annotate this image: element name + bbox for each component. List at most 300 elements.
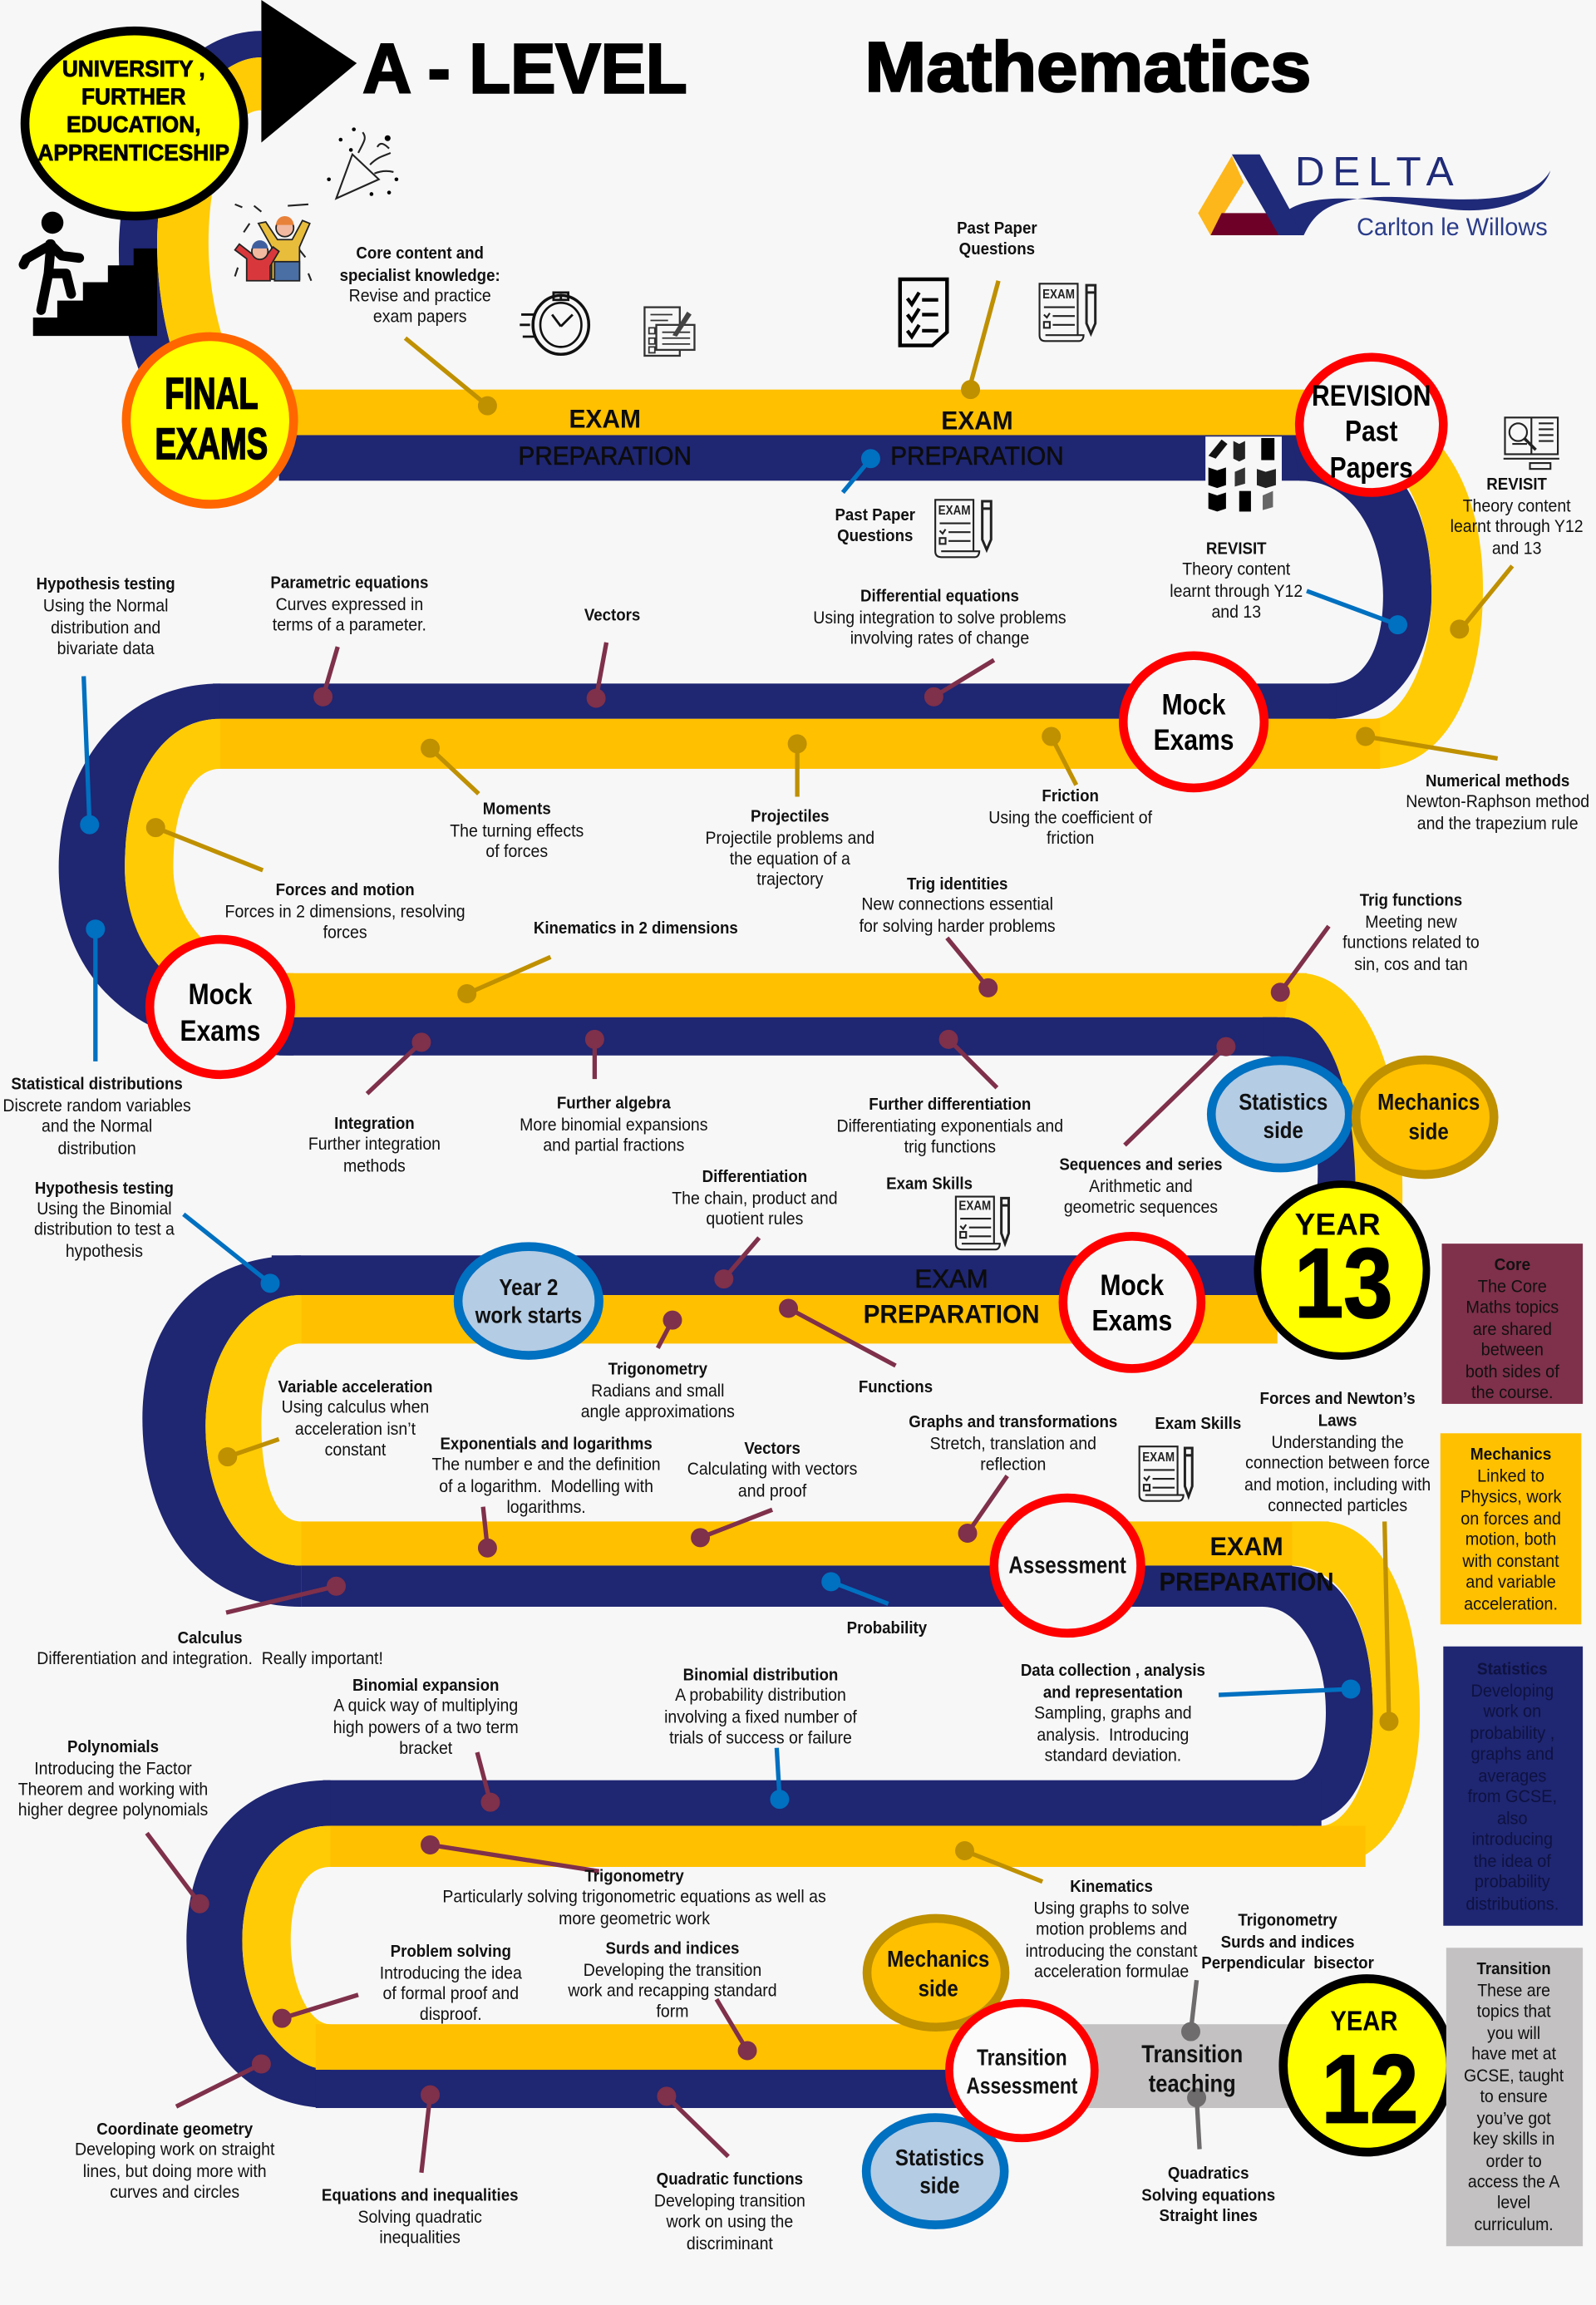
topic: Quadratics, solving equations, straight lines: Quadratics bbox=[1168, 2164, 1249, 2183]
topic: Differentiation: quotient rules bbox=[706, 1209, 803, 1229]
topic: Trig identities: for solving harder problems bbox=[860, 918, 1056, 936]
logo: Delta Carlton le Willows: DELTA bbox=[1295, 149, 1454, 195]
topic: Revisit (left): learnt through Y12 bbox=[1170, 582, 1303, 601]
topic: Exponentials and logarithms: The number e and the definition bbox=[432, 1455, 661, 1475]
exam preparation label 1 bbox=[519, 404, 692, 470]
node: University, further education, apprenticeship: UNIVERSITY , bbox=[62, 56, 205, 81]
topic: Further algebra: Further algebra bbox=[557, 1094, 671, 1113]
topic: Differentiation: The chain, product and bbox=[672, 1189, 838, 1209]
topic: Differential equations: involving rates of change bbox=[850, 629, 1029, 648]
topic: Forces and motion bbox=[147, 819, 466, 943]
topic: Forces and Newton's Laws: Laws bbox=[1318, 1411, 1357, 1431]
topic: Forces and Newton's Laws: connection between force bbox=[1245, 1454, 1430, 1473]
topic: Binomial distribution bbox=[664, 1666, 857, 1808]
topic: Hypothesis testing (Normal): bivariate data bbox=[57, 639, 155, 658]
topic: Vectors (year 12) bbox=[687, 1439, 857, 1546]
topic: Hypothesis testing (Normal): Hypothesis testing bbox=[37, 574, 175, 593]
topic: Trigonometry (year 12): Radians and small bbox=[591, 1382, 724, 1401]
node: Statistics side (year 12): Statistics bbox=[895, 2146, 984, 2170]
panel: Transition: These are bbox=[1477, 1982, 1550, 2001]
topic: Functions: Functions bbox=[859, 1377, 933, 1396]
topic: Trigonometry, surds and indices, perpendicular bisector: Trigonometry bbox=[1238, 1911, 1337, 1930]
node: Mock Exams (year 13 end) bbox=[1123, 656, 1264, 788]
topic: Statistical distributions: and the Normal bbox=[42, 1117, 152, 1136]
panel: Mechanics bbox=[1441, 1433, 1581, 1624]
topic: Trigonometry, surds and indices, perpendicular bisector: Surds and indices bbox=[1221, 1933, 1355, 1952]
node: Mock Exams (year 13 start): Exams bbox=[180, 1014, 260, 1047]
topic: Sequences and series bbox=[1059, 1038, 1234, 1217]
topic: Trig identities: Trig identities bbox=[907, 874, 1007, 894]
topic: Forces and Newton's Laws: Forces and Newton’s bbox=[1260, 1389, 1416, 1408]
topic: Kinematics: introducing the constant bbox=[1026, 1942, 1198, 1961]
icon: exam paper assessment bbox=[1140, 1446, 1192, 1501]
logo: Delta Carlton le Willows: Carlton le Willows bbox=[1357, 214, 1548, 241]
topic: Polynomials bbox=[18, 1737, 209, 1913]
node: Year 13: 13 bbox=[1294, 1228, 1392, 1338]
topic: Calculus bbox=[37, 1578, 383, 1668]
topic: Vectors (year 12): and proof bbox=[738, 1482, 807, 1501]
topic: Binomial distribution: trials of success or failure bbox=[669, 1729, 852, 1748]
topic: Moments: Moments bbox=[483, 800, 551, 819]
topic: Core content and specialist knowledge: Core content and bbox=[356, 244, 484, 263]
topic: Integration: Integration bbox=[334, 1115, 415, 1133]
topic: Graphs and transformations: reflection bbox=[980, 1455, 1046, 1475]
exam preparation label 1: PREPARATION bbox=[519, 441, 692, 470]
icon: exam paper lower: EXAM bbox=[938, 504, 971, 518]
topic: Problem solving: Introducing the idea bbox=[380, 1964, 522, 1983]
icon: stopwatch bbox=[520, 293, 589, 354]
panel: Transition: GCSE, taught bbox=[1464, 2066, 1564, 2086]
node: Statistics side (year 12): side bbox=[919, 2174, 960, 2199]
topic: Revisit (right): and 13 bbox=[1492, 539, 1541, 559]
node: Revision past papers: Papers bbox=[1330, 451, 1413, 484]
topic: Problem solving: of formal proof and bbox=[383, 1984, 519, 2003]
panel: Statistics: also bbox=[1497, 1809, 1528, 1829]
label: Exam Skills (year 12): Exam Skills bbox=[1155, 1414, 1241, 1433]
topic: Hypothesis testing (Binomial): distribution to test a bbox=[34, 1220, 175, 1239]
panel: Transition: to ensure bbox=[1480, 2087, 1548, 2106]
topic: Further differentiation bbox=[837, 1031, 1063, 1157]
node: Transition Assessment: Assessment bbox=[966, 2073, 1078, 2099]
topic: Numerical methods bbox=[1357, 727, 1589, 834]
topic: Trig functions: sin, cos and tan bbox=[1354, 956, 1468, 974]
topic: Past Paper Questions (lower): Past Paper bbox=[835, 505, 915, 525]
topic: Trigonometry (year 12): Trigonometry bbox=[608, 1360, 707, 1379]
topic: Graphs and transformations: Graphs and transformations bbox=[909, 1413, 1117, 1431]
node: Assessment: Assessment bbox=[1008, 1551, 1126, 1579]
topic: Functions bbox=[780, 1299, 933, 1396]
topic: Kinematics: Kinematics bbox=[1070, 1877, 1153, 1896]
icon: celebrating people bbox=[235, 204, 311, 281]
topic: Further algebra bbox=[520, 1031, 707, 1155]
topic: Core content and specialist knowledge: exam papers bbox=[373, 308, 466, 327]
topic: Binomial expansion: A quick way of multiplying bbox=[333, 1697, 518, 1716]
topic: Data collection, analysis and representation: and representation bbox=[1043, 1683, 1183, 1702]
topic: Integration bbox=[308, 1033, 441, 1176]
topic: Binomial expansion: bracket bbox=[399, 1739, 453, 1758]
panel: Statistics: the idea of bbox=[1474, 1851, 1551, 1871]
node: Mechanics side (year 13) bbox=[1356, 1060, 1494, 1175]
panel: Mechanics: acceleration. bbox=[1464, 1594, 1558, 1614]
topic: Numerical methods: and the trapezium rule bbox=[1417, 815, 1579, 834]
exam preparation label 3: EXAM bbox=[914, 1263, 988, 1293]
banner arrow bbox=[261, 0, 357, 143]
topic: Quadratic functions: work on using the bbox=[666, 2213, 793, 2231]
topic: Calculus: Calculus bbox=[178, 1628, 243, 1647]
topic: Coordinate geometry: curves and circles bbox=[110, 2183, 239, 2202]
topic: Friction: Using the coefficient of bbox=[988, 809, 1152, 828]
topic: Forces and Newton's Laws: Understanding the bbox=[1272, 1433, 1404, 1452]
topic: Statistical distributions: Discrete random variables bbox=[2, 1096, 191, 1116]
topic: Revisit (left): Theory content bbox=[1182, 560, 1291, 579]
topic: Surds and indices: Surds and indices bbox=[606, 1939, 740, 1958]
topic: Past Paper Questions (top): Past Paper bbox=[957, 219, 1037, 238]
topic: Revisit (right): learnt through Y12 bbox=[1451, 517, 1584, 536]
topic: Projectiles: the equation of a bbox=[730, 850, 851, 869]
topic: Trigonometry (year 12): angle approximations bbox=[581, 1402, 735, 1421]
topic: Data collection, analysis and representation: standard deviation. bbox=[1045, 1746, 1181, 1766]
topic: Trigonometry (transition year): Trigonometry bbox=[584, 1867, 684, 1886]
topic: Forces and Newton's Laws bbox=[1244, 1389, 1431, 1731]
topic: Parametric equations: Curves expressed in bbox=[276, 595, 423, 614]
topic: Polynomials: Theorem and working with bbox=[18, 1780, 208, 1800]
node: University, further education, apprenticeship: FURTHER bbox=[81, 84, 185, 110]
topic: Further differentiation: Differentiating exponentials and bbox=[837, 1117, 1063, 1136]
topic: Coordinate geometry: Coordinate geometry bbox=[96, 2120, 253, 2139]
topic: Revisit (right) bbox=[1451, 475, 1584, 638]
node: Assessment bbox=[994, 1498, 1140, 1633]
topic: Core content and specialist knowledge bbox=[340, 244, 500, 415]
topic: Friction bbox=[988, 727, 1152, 848]
topic: Binomial distribution: involving a fixed number of bbox=[664, 1708, 857, 1727]
topic: Trigonometry (year 12) bbox=[581, 1311, 735, 1421]
topic: Kinematics: Using graphs to solve bbox=[1033, 1899, 1190, 1918]
panel: Transition bbox=[1446, 1948, 1583, 2246]
node: Mock Exams (year 13 end): Mock bbox=[1162, 687, 1226, 721]
panel: Statistics: introducing bbox=[1472, 1830, 1553, 1849]
topic: Statistical distributions bbox=[2, 920, 191, 1158]
node: Mock Exams (year 13 start) bbox=[150, 939, 291, 1075]
topic: Vectors (year 13): Vectors bbox=[584, 606, 640, 625]
topic: Trigonometry, surds and indices, perpendicular bisector bbox=[1182, 1911, 1374, 2041]
topic: Exponentials and logarithms: logarithms. bbox=[506, 1498, 586, 1517]
exam preparation label 3: PREPARATION bbox=[864, 1299, 1040, 1329]
panel: Statistics: work on bbox=[1482, 1702, 1541, 1721]
topic: Parametric equations bbox=[270, 574, 428, 706]
topic: Trig identities bbox=[860, 874, 1056, 997]
topic: Moments: of forces bbox=[485, 842, 548, 861]
node: Statistics side (year 12) bbox=[866, 2118, 1004, 2225]
node: Mock Exams (year 13 end): Exams bbox=[1154, 723, 1234, 756]
topic: Variable acceleration: constant bbox=[325, 1441, 387, 1460]
topic: Coordinate geometry: lines, but doing more with bbox=[83, 2162, 267, 2181]
topic: Trigonometry (transition year) bbox=[421, 1836, 826, 1928]
panel: Transition: topics that bbox=[1477, 2002, 1551, 2022]
topic: Quadratics, solving equations, straight lines: Solving equations bbox=[1141, 2186, 1275, 2205]
topic: Equations and inequalities bbox=[322, 2086, 519, 2248]
topic: Vectors (year 13) bbox=[584, 606, 640, 707]
panel: Mechanics: Mechanics bbox=[1470, 1446, 1551, 1464]
topic: Trigonometry (transition year): more geometric work bbox=[559, 1909, 711, 1928]
topic: Statistical distributions: Statistical distributions bbox=[11, 1075, 183, 1094]
node: University, further education, apprenticeship bbox=[25, 31, 244, 216]
topic: Quadratic functions: Quadratic functions bbox=[657, 2170, 803, 2189]
topic: Equations and inequalities: Equations and inequalities bbox=[322, 2186, 519, 2205]
panel: Mechanics: on forces and bbox=[1461, 1509, 1561, 1529]
panel: Statistics: Developing bbox=[1470, 1681, 1554, 1701]
node: Mechanics side (year 12): side bbox=[919, 1977, 958, 2002]
topic: Exponentials and logarithms bbox=[432, 1435, 661, 1557]
panel: Core: between bbox=[1481, 1340, 1544, 1360]
topic: Sequences and series: Arithmetic and bbox=[1089, 1178, 1193, 1196]
topic: Kinematics: motion problems and bbox=[1036, 1920, 1187, 1939]
panel: Statistics: distributions. bbox=[1465, 1894, 1559, 1913]
panel: Statistics: graphs and bbox=[1470, 1744, 1554, 1764]
node: Final exams bbox=[126, 337, 293, 505]
topic: Past Paper Questions (top): Questions bbox=[959, 239, 1035, 259]
panel: Statistics: probability , bbox=[1470, 1724, 1554, 1743]
topic: Forces and Newton's Laws: connected particles bbox=[1268, 1496, 1407, 1515]
panel: Transition: you will bbox=[1487, 2024, 1540, 2043]
topic: Binomial expansion: Binomial expansion bbox=[352, 1676, 499, 1695]
node: Statistics side (year 13): side bbox=[1264, 1118, 1303, 1143]
topic: Problem solving: Problem solving bbox=[391, 1942, 511, 1961]
topic: Friction: friction bbox=[1047, 829, 1094, 848]
topic: Projectiles bbox=[705, 735, 874, 889]
node: Year 12: YEAR bbox=[1330, 2005, 1398, 2037]
node: Revision past papers bbox=[1299, 357, 1443, 492]
icon: exam paper top bbox=[1040, 283, 1096, 341]
panel: Transition: access the A bbox=[1468, 2173, 1560, 2192]
topic: Probability: Probability bbox=[847, 1618, 927, 1638]
exam preparation label 2: PREPARATION bbox=[890, 441, 1064, 470]
topic: Forces and motion: forces bbox=[323, 923, 367, 943]
node: Transition Assessment bbox=[949, 2003, 1095, 2138]
topic: Surds and indices bbox=[567, 1939, 777, 2060]
icon: checklist bbox=[900, 279, 947, 346]
topic: Forces and motion: Forces and motion bbox=[276, 880, 415, 899]
topic: Sequences and series: Sequences and series bbox=[1059, 1155, 1223, 1175]
panel: Mechanics: motion, both bbox=[1465, 1529, 1556, 1549]
topic: Trig functions: Meeting new bbox=[1365, 913, 1457, 932]
label: Exam Skills (year 13): Exam Skills bbox=[886, 1175, 973, 1194]
node: Year 12 bbox=[1283, 1978, 1451, 2152]
icon: exam paper top: EXAM bbox=[1042, 288, 1075, 302]
topic: Differential equations: Using integration to solve problems bbox=[813, 608, 1066, 628]
topic: Kinematics in 2 dimensions bbox=[458, 919, 738, 1002]
exam preparation label 1: EXAM bbox=[569, 404, 641, 434]
logo: Delta Carlton le Willows bbox=[1198, 149, 1550, 241]
topic: Revisit (right): Theory content bbox=[1463, 497, 1571, 516]
exam preparation label 2 bbox=[890, 405, 1064, 470]
topic: Hypothesis testing (Binomial): Hypothesis testing bbox=[35, 1179, 174, 1198]
topic: Projectiles: Projectile problems and bbox=[705, 829, 874, 848]
panel: Mechanics: Physics, work bbox=[1461, 1487, 1562, 1507]
topic: Hypothesis testing (Binomial): hypothesis bbox=[66, 1242, 143, 1261]
topic: Trigonometry (transition year): Particularly solving trigonometric equations as well as bbox=[442, 1888, 826, 1907]
topic: Statistical distributions: distribution bbox=[57, 1140, 136, 1158]
topic: Calculus: Differentiation and integration. Really important! bbox=[37, 1649, 383, 1668]
node: Year 13 bbox=[1258, 1185, 1426, 1356]
topic: Core content and specialist knowledge: Revise and practice bbox=[349, 287, 491, 306]
topic: Quadratic functions: Developing transition bbox=[654, 2192, 805, 2211]
title: A - LEVEL: A - LEVEL bbox=[362, 28, 687, 107]
topic: Hypothesis testing (Normal) bbox=[37, 574, 175, 834]
topic: Moments: The turning effects bbox=[450, 822, 584, 840]
topic: Coordinate geometry: Developing work on straight bbox=[75, 2140, 275, 2160]
node: University, further education, apprenticeship: APPRENTICESHIP bbox=[37, 140, 229, 165]
topic: Further algebra: More binomial expansions bbox=[520, 1116, 707, 1135]
topic: Equations and inequalities: Solving quadratic bbox=[357, 2208, 482, 2227]
panel: Transition: have met at bbox=[1471, 2045, 1556, 2064]
topic: Numerical methods: Numerical methods bbox=[1426, 771, 1569, 790]
topic: Further differentiation: trig functions bbox=[904, 1138, 996, 1157]
topic: Forces and motion: Forces in 2 dimensions, resolving bbox=[225, 903, 466, 922]
topic: Polynomials: Polynomials bbox=[67, 1737, 159, 1756]
node: Mock Exams (year 12 end): Exams bbox=[1091, 1303, 1172, 1337]
icon: exam paper year 13 bbox=[956, 1197, 1008, 1249]
node: Mock Exams (year 12 end) bbox=[1063, 1236, 1201, 1368]
icon: open book with magnifier bbox=[1504, 417, 1559, 469]
topic: Differential equations bbox=[813, 587, 1066, 706]
topic: Vectors (year 12): Calculating with vectors bbox=[687, 1460, 857, 1479]
panel: Transition: key skills in bbox=[1473, 2130, 1554, 2149]
icon: party popper bbox=[327, 127, 398, 199]
topic: Graphs and transformations: Stretch, translation and bbox=[930, 1435, 1096, 1454]
topic: Hypothesis testing (Normal): Using the Normal bbox=[43, 597, 168, 616]
topic: Exponentials and logarithms: Exponentials and logarithms bbox=[440, 1435, 653, 1454]
panel: Mechanics: Linked to bbox=[1477, 1466, 1544, 1486]
exam preparation label 4 bbox=[1160, 1531, 1334, 1597]
node: Mock Exams (year 13 start): Mock bbox=[189, 978, 253, 1010]
topic: Parametric equations: terms of a parameter. bbox=[273, 616, 426, 635]
topic: Trig functions: functions related to bbox=[1342, 933, 1480, 953]
topic: Coordinate geometry bbox=[75, 2055, 275, 2202]
panel: Statistics: probability bbox=[1475, 1872, 1550, 1892]
icon: exam paper lower bbox=[935, 500, 991, 557]
topic: Variable acceleration: Variable acceleration bbox=[278, 1377, 432, 1396]
topic: Quadratic functions: discriminant bbox=[687, 2234, 773, 2253]
topic: Variable acceleration bbox=[219, 1377, 432, 1465]
topic: Past Paper Questions (lower): Questions bbox=[837, 526, 914, 545]
topic: Graphs and transformations bbox=[909, 1413, 1117, 1542]
exam preparation label 4: EXAM bbox=[1209, 1531, 1283, 1561]
topic: Trig functions: Trig functions bbox=[1360, 891, 1462, 910]
topic: Surds and indices: form bbox=[656, 2002, 688, 2022]
panel: Core: are shared bbox=[1473, 1319, 1552, 1339]
topic: Hypothesis testing (Binomial) bbox=[34, 1179, 279, 1293]
node: Mechanics side (year 13): side bbox=[1409, 1120, 1449, 1145]
topic: Numerical methods: Newton-Raphson method bbox=[1406, 792, 1589, 811]
node: Year 13: YEAR bbox=[1295, 1207, 1381, 1242]
title: Mathematics: Mathematics bbox=[864, 27, 1311, 106]
node: Year 2 work starts bbox=[458, 1247, 599, 1356]
topic: Data collection, analysis and representation: Data collection , analysis bbox=[1021, 1661, 1205, 1680]
topic: Past Paper Questions (top) bbox=[957, 219, 1037, 398]
topic: Moments bbox=[421, 740, 584, 861]
panel: Statistics: from GCSE, bbox=[1468, 1787, 1557, 1806]
topic: Sequences and series: geometric sequences bbox=[1064, 1198, 1218, 1217]
topic: Hypothesis testing (Normal): distribution and bbox=[51, 619, 160, 638]
panel: Transition: Transition bbox=[1476, 1959, 1551, 1978]
panel: Core: Maths topics bbox=[1465, 1298, 1559, 1317]
topic: Kinematics: acceleration formulae bbox=[1034, 1963, 1189, 1982]
topic: Binomial distribution: A probability distribution bbox=[675, 1686, 846, 1705]
topic: Surds and indices: Developing the transition bbox=[584, 1961, 761, 1980]
topic: Exponentials and logarithms: of a logarithm. Modelling with bbox=[439, 1477, 653, 1496]
node: Mock Exams (year 12 end): Mock bbox=[1100, 1268, 1165, 1302]
topic: Data collection, analysis and representation: analysis. Introducing bbox=[1037, 1726, 1189, 1745]
topic: Kinematics in 2 dimensions: Kinematics in 2 dimensions bbox=[534, 919, 738, 938]
topic: Hypothesis testing (Binomial): Using the Binomial bbox=[37, 1199, 172, 1219]
panel: Core: both sides of bbox=[1465, 1362, 1559, 1382]
label: Transition teaching bbox=[1141, 2040, 1243, 2097]
node: Final exams: EXAMS bbox=[155, 419, 268, 468]
topic: Parametric equations: Parametric equations bbox=[270, 574, 428, 593]
topic: Quadratic functions bbox=[654, 2087, 805, 2253]
topic: Equations and inequalities: inequalities bbox=[379, 2229, 461, 2248]
node: Mechanics side (year 12) bbox=[867, 1918, 1005, 2027]
topic: Further differentiation: Further differentiation bbox=[869, 1096, 1031, 1114]
icon: stairs and climbing figure bbox=[23, 212, 157, 336]
label: Transition teaching: teaching bbox=[1149, 2070, 1236, 2097]
panel: Transition: you’ve got bbox=[1477, 2110, 1551, 2129]
panel: Transition: level bbox=[1497, 2194, 1530, 2212]
topic: Revisit (left): REVISIT bbox=[1206, 539, 1267, 559]
exam preparation label 4: PREPARATION bbox=[1160, 1566, 1334, 1597]
node: Statistics side (year 13) bbox=[1211, 1061, 1349, 1168]
topic: Differentiation: Differentiation bbox=[702, 1167, 807, 1186]
topic: Kinematics bbox=[956, 1842, 1198, 1982]
node: Revision past papers: REVISION bbox=[1312, 379, 1431, 412]
topic: Friction: Friction bbox=[1042, 786, 1099, 805]
topic: Past Paper Questions (lower) bbox=[835, 450, 915, 545]
node: Revision past papers: Past bbox=[1345, 414, 1398, 447]
node: Year 12: 12 bbox=[1322, 2036, 1418, 2144]
icon: exam paper assessment: EXAM bbox=[1142, 1450, 1175, 1465]
topic: Polynomials: Introducing the Factor bbox=[34, 1760, 192, 1779]
topic: Further algebra: and partial fractions bbox=[543, 1136, 684, 1155]
topic: Binomial expansion bbox=[333, 1676, 519, 1811]
icon: written form and pen bbox=[644, 308, 694, 356]
topic: Trig functions bbox=[1272, 891, 1480, 1001]
icon: exam paper year 13: EXAM bbox=[958, 1199, 991, 1213]
node: Year 2 work starts: Year 2 bbox=[499, 1276, 558, 1300]
topic: Quadratics, solving equations, straight lines bbox=[1141, 2089, 1275, 2225]
node: University, further education, apprenticeship: EDUCATION, bbox=[66, 112, 201, 137]
topic: Projectiles: trajectory bbox=[756, 870, 824, 889]
topic: Projectiles: Projectiles bbox=[751, 807, 830, 826]
panel: Core: The Core bbox=[1478, 1277, 1547, 1297]
topic: Core content and specialist knowledge: specialist knowledge: bbox=[340, 266, 500, 285]
topic: Forces and Newton's Laws: and motion, including with bbox=[1244, 1476, 1431, 1495]
topic: Differential equations: Differential equations bbox=[860, 587, 1019, 606]
topic: Differentiation bbox=[672, 1167, 838, 1288]
panel: Mechanics: and variable bbox=[1465, 1572, 1556, 1592]
topic: Data collection, analysis and representation bbox=[1021, 1661, 1360, 1766]
topic: Revisit (right): REVISIT bbox=[1486, 475, 1547, 494]
topic: Problem solving bbox=[273, 1942, 522, 2027]
topic: Variable acceleration: acceleration isn’t bbox=[295, 1420, 416, 1439]
topic: Surds and indices: work and recapping standard bbox=[567, 1982, 777, 2001]
topic: Binomial distribution: Binomial distribution bbox=[683, 1666, 838, 1685]
node: Year 2 work starts: work starts bbox=[475, 1303, 582, 1328]
topic: Integration: Further integration bbox=[308, 1135, 441, 1154]
topic: Quadratics, solving equations, straight lines: Straight lines bbox=[1160, 2206, 1258, 2225]
panel: Core: Core bbox=[1495, 1255, 1530, 1274]
label: Transition teaching: Transition bbox=[1141, 2040, 1243, 2068]
panel: Transition: curriculum. bbox=[1474, 2215, 1554, 2234]
